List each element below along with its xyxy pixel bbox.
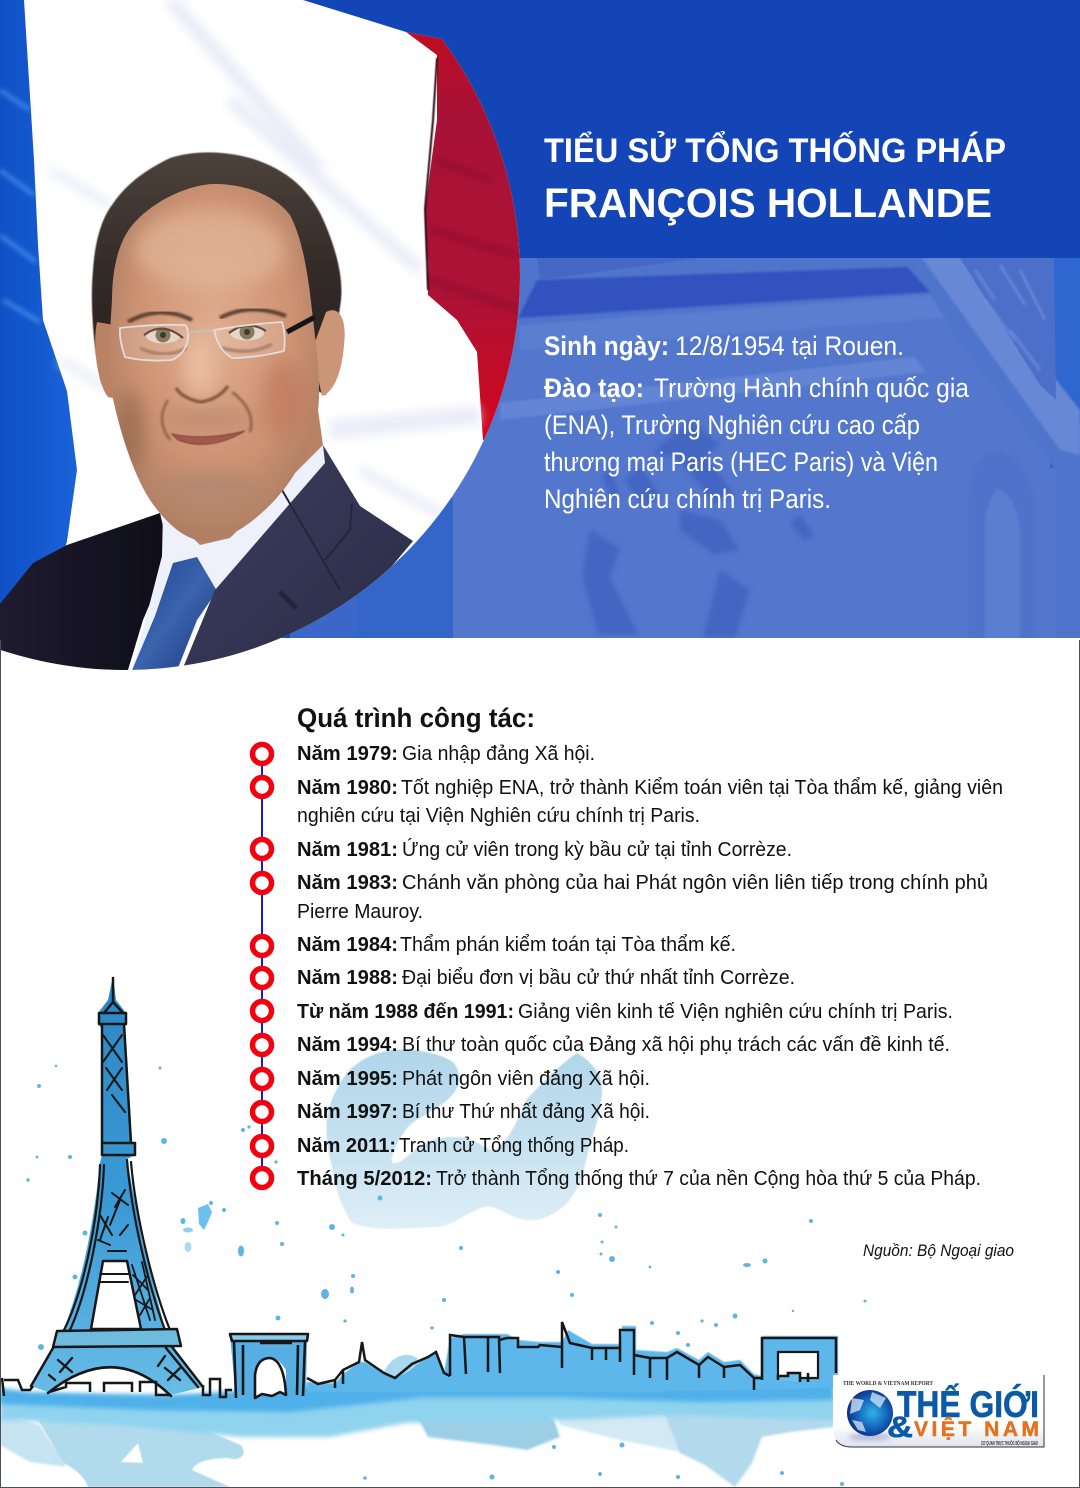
entry 1995 bbox=[297, 1068, 650, 1090]
entry 1980: Tốt nghiệp ENA, trở thành Kiểm toán viên tại Tòa thẩm kế, giảng viên bbox=[401, 777, 1003, 799]
entry 1995: Năm 1995: bbox=[297, 1068, 398, 1090]
skyline outline right bbox=[634, 1352, 762, 1390]
entry 1981: Ứng cử viên trong kỳ bầu cử tại tỉnh Corrèze. bbox=[402, 838, 792, 861]
entry 1983 bbox=[297, 872, 988, 923]
header cut-out above flag bbox=[303, 0, 560, 40]
white shirt collar bbox=[130, 445, 325, 680]
title: TIỂU SỬ TỔNG THỐNG PHÁP bbox=[544, 131, 1006, 170]
personal information text: (ENA), Trường Nghiên cứu cao cấp bbox=[544, 410, 920, 440]
facial shading bbox=[116, 210, 307, 510]
logo: The Gioi & Viet Nam: THE WORLD & VIETNAM REPORT bbox=[843, 1381, 933, 1387]
glasses bbox=[120, 317, 315, 361]
timeline entries bbox=[297, 743, 1003, 1190]
entry 1979: Gia nhập đảng Xã hội. bbox=[402, 743, 595, 765]
logo: The Gioi & Viet Nam: VIỆT NAM bbox=[914, 1417, 1039, 1441]
right suit jacket bbox=[178, 445, 413, 680]
entry 1988-1991: Giảng viên kinh tế Viện nghiên cứu chính trị Paris. bbox=[518, 1001, 953, 1023]
centre darker wash bbox=[411, 1400, 560, 1450]
icon: Grande Arche bbox=[762, 1338, 836, 1382]
entry 1983: Pierre Mauroy. bbox=[297, 901, 423, 923]
entry 1988: Đại biểu đơn vị bầu cử thứ nhất tỉnh Corrèze. bbox=[402, 967, 795, 989]
entry 1995: Phát ngôn viên đảng Xã hội. bbox=[402, 1068, 650, 1090]
saturated wash bbox=[0, 1370, 834, 1412]
watercolour splash behind timeline bbox=[326, 1050, 602, 1229]
personal information text: Đào tạo: bbox=[544, 373, 644, 403]
logo: The Gioi & Viet Nam bbox=[833, 1375, 1044, 1447]
entry 1979 bbox=[297, 743, 595, 765]
brows and eyes bbox=[128, 309, 286, 354]
timeline heading: Quá trình công tác: bbox=[297, 703, 535, 733]
nose bbox=[176, 386, 228, 402]
icon: Arc de Triomphe bbox=[230, 1334, 308, 1398]
background photo: triumphal arch tinted blue bbox=[290, 258, 1080, 640]
mouth bbox=[172, 431, 245, 444]
pale streak wash bbox=[554, 1405, 686, 1453]
entry 1980 bbox=[297, 777, 1003, 827]
entry 1981: Năm 1981: bbox=[297, 839, 398, 861]
logo: The Gioi & Viet Nam: & bbox=[887, 1411, 913, 1444]
personal information text: Nghiên cứu chính trị Paris. bbox=[544, 484, 831, 514]
pale wash below band bbox=[0, 1395, 834, 1437]
wash behind buildings bbox=[307, 1326, 838, 1392]
icon: Eiffel tower bbox=[31, 976, 203, 1396]
personal information text: 12/8/1954 tại Rouen. bbox=[675, 331, 904, 361]
necktie bbox=[130, 557, 217, 675]
personal information text: Trường Hành chính quốc gia bbox=[654, 373, 970, 403]
left suit jacket bbox=[0, 513, 170, 680]
skyline buildings centre bbox=[450, 1322, 634, 1376]
pale puffs behind skyline bbox=[384, 1355, 418, 1378]
skyline outline centre bbox=[307, 1342, 450, 1388]
lower left wash bbox=[38, 1412, 244, 1487]
entry 1988-1991 bbox=[297, 1001, 953, 1023]
personal information text bbox=[544, 331, 970, 514]
smile lines bbox=[162, 392, 251, 440]
entry 2011 bbox=[297, 1135, 629, 1157]
watercolour skyline wash bbox=[0, 1326, 838, 1487]
entry 1984: Thẩm phán kiểm toán tại Tòa thẩm kế. bbox=[400, 934, 736, 956]
entry 1983: Năm 1983: bbox=[297, 872, 398, 894]
timeline rail with ring markers bbox=[252, 744, 272, 1188]
far-left wash bbox=[0, 1415, 66, 1467]
left ear bbox=[95, 322, 113, 398]
neck bbox=[194, 410, 323, 545]
entry 1979: Năm 1979: bbox=[297, 743, 398, 765]
entry 2011: Tranh cử Tổng thống Pháp. bbox=[399, 1135, 629, 1157]
ink splatter dots bbox=[26, 1065, 867, 1486]
entry 1994: Bí thư toàn quốc của Đảng xã hội phụ trách các vấn đề kinh tế. bbox=[402, 1034, 950, 1056]
entry 1997: Năm 1997: bbox=[297, 1101, 398, 1123]
right ear bbox=[312, 310, 345, 396]
personal information text: Sinh ngày: bbox=[544, 331, 669, 361]
entry 1994: Năm 1994: bbox=[297, 1034, 398, 1056]
entry 1988: Năm 1988: bbox=[297, 967, 398, 989]
source note: Nguồn: Bộ Ngoại giao bbox=[863, 1241, 1014, 1260]
portrait circle with French flag bbox=[0, 0, 560, 680]
skyline outline left bbox=[2, 1378, 232, 1397]
page edge line bbox=[0, 640, 1080, 1488]
entry 1984: Năm 1984: bbox=[297, 934, 398, 956]
header background panel bbox=[281, 0, 1080, 638]
title bbox=[544, 131, 1006, 226]
entry 1983: Chánh văn phòng của hai Phát ngôn viên liên tiếp trong chính phủ bbox=[402, 872, 988, 894]
title: FRANÇOIS HOLLANDE bbox=[544, 180, 992, 226]
logo: The Gioi & Viet Nam: CƠ QUAN TRỰC THUỘC BỘ NGOẠI GIAO bbox=[981, 1439, 1038, 1447]
hair bbox=[92, 152, 341, 395]
entry 2012: Tháng 5/2012: bbox=[297, 1168, 432, 1190]
logo: The Gioi & Viet Nam: THẾ GIỚI bbox=[897, 1383, 1039, 1425]
face bbox=[110, 184, 319, 541]
entry 1988-1991: Từ năm 1988 đến 1991: bbox=[297, 1001, 514, 1023]
personal information text: thương mại Paris (HEC Paris) và Viện bbox=[544, 447, 938, 477]
entry 1980: nghiên cứu tại Viện Nghiên cứu chính trị Paris. bbox=[297, 805, 700, 827]
flag bbox=[0, 0, 520, 638]
entry 1980: Năm 1980: bbox=[297, 777, 398, 799]
entry 2011: Năm 2011: bbox=[297, 1135, 396, 1157]
entry 1997 bbox=[297, 1101, 650, 1123]
entry 2012: Trở thành Tổng thống thứ 7 của nền Cộng hòa thứ 5 của Pháp. bbox=[436, 1168, 981, 1190]
right wash bbox=[661, 1397, 834, 1487]
entry 1997: Bí thư Thứ nhất đảng Xã hội. bbox=[402, 1101, 650, 1123]
